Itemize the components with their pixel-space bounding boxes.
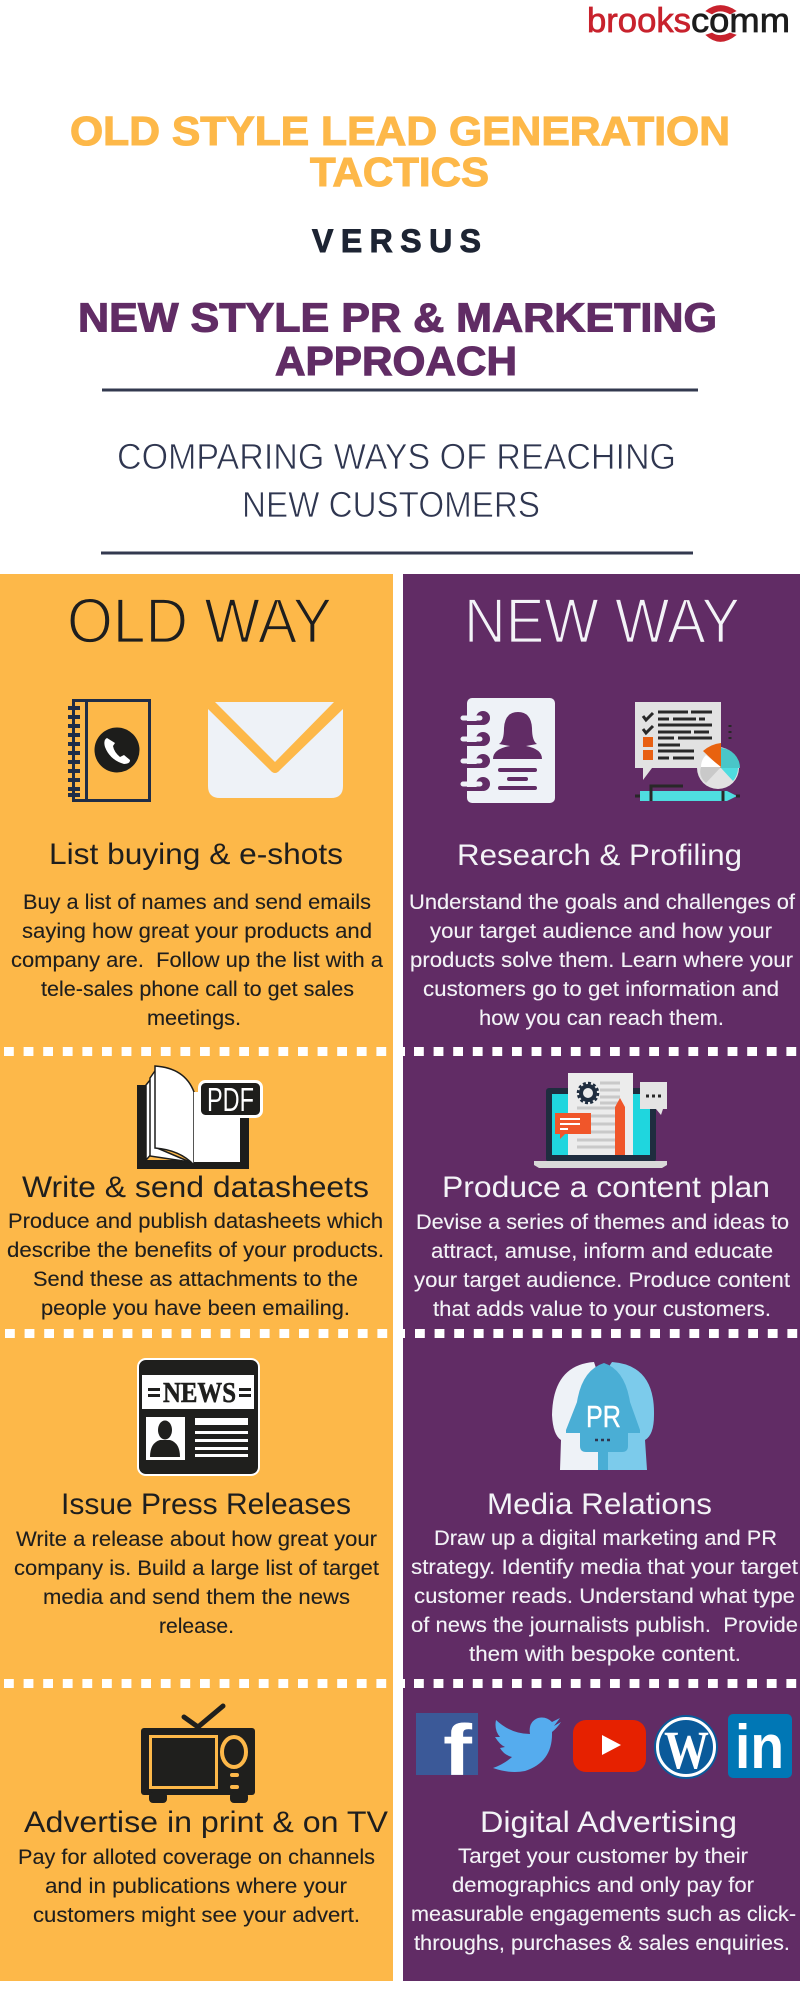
panel: new way bbox=[403, 574, 800, 1981]
text block: media relations description: Draw up a digital marketing and PR bbox=[434, 1526, 777, 1550]
logo: brookscomm bbox=[587, 2, 790, 42]
heading: research and profiling: Research & Profiling bbox=[457, 839, 742, 872]
icon: linkedin: in bbox=[735, 1713, 784, 1782]
icon: newspaper: NEWS bbox=[163, 1378, 236, 1409]
text block: digital advertising description: throughs, purchases & sales enquiries. bbox=[414, 1931, 790, 1955]
text block: content plan description: Devise a series of themes and ideas to bbox=[416, 1210, 789, 1234]
text block: research description: customers go to get information and bbox=[423, 977, 779, 1001]
text block: list buying description: company are. Follow up the list with a bbox=[11, 948, 383, 972]
icon: twitter bbox=[493, 1718, 561, 1772]
text block: list buying description bbox=[11, 890, 383, 1030]
text block: research description bbox=[409, 890, 795, 1030]
text block: digital advertising description: Target your customer by their bbox=[458, 1844, 748, 1868]
text block: digital advertising description: demographics and only pay for bbox=[452, 1873, 754, 1897]
text block: research description: how you can reach them. bbox=[479, 1006, 724, 1030]
heading: advertise in print and on tv: Advertise in print & on TV bbox=[24, 1806, 388, 1839]
icon: television bbox=[141, 1706, 255, 1803]
text block: press release description bbox=[14, 1527, 379, 1638]
text block: press release description: release. bbox=[159, 1614, 234, 1638]
text block: press release description: media and send them the news bbox=[43, 1585, 350, 1609]
text block: content plan description: that adds value to your customers. bbox=[433, 1297, 771, 1321]
text block: research description: products solve them. Learn where your bbox=[410, 948, 793, 972]
text block: media relations description bbox=[411, 1526, 798, 1666]
text block: datasheets description: Send these as attachments to the bbox=[33, 1267, 358, 1291]
text block: datasheets description: people you have been emailing. bbox=[41, 1296, 350, 1320]
icon: PR head bbox=[552, 1362, 654, 1470]
heading: digital advertising: Digital Advertising bbox=[480, 1806, 737, 1839]
logo: brookscomm: comm bbox=[691, 2, 790, 40]
text block: content plan description: your target audience. Produce content bbox=[414, 1268, 790, 1292]
heading: list buying and e-shots: List buying & e-shots bbox=[49, 838, 343, 871]
text block: list buying description: Buy a list of names and send emails bbox=[23, 890, 371, 914]
text block: list buying description: saying how great your products and bbox=[22, 919, 372, 943]
logo: brookscomm: brooks bbox=[587, 2, 691, 40]
icon: laptop with content document bbox=[534, 1073, 667, 1168]
text block: media relations description: them with bespoke content. bbox=[469, 1642, 741, 1666]
text block: content plan description: attract, amuse, inform and educate bbox=[431, 1239, 773, 1263]
icon: youtube bbox=[573, 1720, 646, 1772]
title: old style lead generation tactics: OLD STYLE LEAD GENERATION bbox=[70, 108, 730, 154]
text block: digital advertising description: measurable engagements such as click- bbox=[411, 1902, 796, 1926]
title: old style lead generation tactics bbox=[70, 108, 730, 195]
text block: advertising description bbox=[18, 1845, 375, 1927]
title: old style lead generation tactics: TACTICS bbox=[310, 149, 489, 195]
text block: media relations description: customer reads. Understand what type bbox=[414, 1584, 795, 1608]
text block: advertising description: customers might see your advert. bbox=[33, 1903, 360, 1927]
icon: pdf book: PDF bbox=[207, 1081, 254, 1118]
title: new style PR and marketing approach: NEW STYLE PR & MARKETING bbox=[78, 294, 717, 340]
text block: press release description: company is. Build a large list of target bbox=[14, 1556, 379, 1580]
icon: pdf book bbox=[137, 1066, 262, 1169]
panel: old way bbox=[0, 574, 393, 1981]
text block: press release description: Write a release about how great your bbox=[16, 1527, 377, 1551]
title: new style PR and marketing approach bbox=[78, 294, 717, 384]
text block: list buying description: meetings. bbox=[147, 1006, 241, 1030]
subtitle: comparing ways of reaching new customers: NEW CUSTOMERS bbox=[242, 484, 540, 525]
heading: media relations: Media Relations bbox=[487, 1488, 712, 1521]
heading: write and send datasheets: Write & send datasheets bbox=[22, 1171, 369, 1204]
text block: media relations description: of news the journalists publish. Provide bbox=[411, 1613, 798, 1637]
text block: advertising description: Pay for alloted coverage on channels bbox=[18, 1845, 375, 1869]
icon: PR head: PR bbox=[586, 1399, 621, 1434]
icon: facebook: f bbox=[443, 1711, 473, 1791]
subtitle: comparing ways of reaching new customers: COMPARING WAYS OF REACHING bbox=[117, 436, 676, 477]
text block: research description: your target audience and how your bbox=[430, 919, 772, 943]
icon: envelope bbox=[208, 702, 343, 798]
icon: phone book bbox=[68, 700, 150, 801]
heading: versus: VERSUS bbox=[312, 223, 481, 259]
heading: produce a content plan: Produce a content plan bbox=[442, 1171, 770, 1204]
text block: digital advertising description bbox=[411, 1844, 796, 1955]
text block: research description: Understand the goals and challenges of bbox=[409, 890, 795, 914]
text block: content plan description bbox=[414, 1210, 790, 1321]
subtitle: comparing ways of reaching new customers bbox=[117, 436, 676, 525]
icon: wordpress: W bbox=[664, 1720, 709, 1780]
icon: newspaper bbox=[138, 1359, 259, 1475]
icons: social media logos bbox=[416, 1711, 792, 1791]
heading: issue press releases: Issue Press Releases bbox=[61, 1488, 351, 1521]
icon: facebook bbox=[416, 1711, 478, 1791]
heading: new way: NEW WAY bbox=[464, 586, 740, 656]
title: new style PR and marketing approach: APPROACH bbox=[275, 338, 517, 384]
text block: advertising description: and in publications where your bbox=[45, 1874, 347, 1898]
text block: list buying description: tele-sales phone call to get sales bbox=[41, 977, 354, 1001]
icon: checklist report with pie chart bbox=[635, 702, 740, 801]
text block: datasheets description: Produce and publish datasheets which bbox=[8, 1209, 383, 1233]
text block: media relations description: strategy. Identify media that your target bbox=[411, 1555, 798, 1579]
icon: profile notebook bbox=[463, 698, 555, 803]
heading: old way: OLD WAY bbox=[67, 586, 332, 656]
text block: datasheets description bbox=[7, 1209, 384, 1320]
text block: datasheets description: describe the benefits of your products. bbox=[7, 1238, 384, 1262]
